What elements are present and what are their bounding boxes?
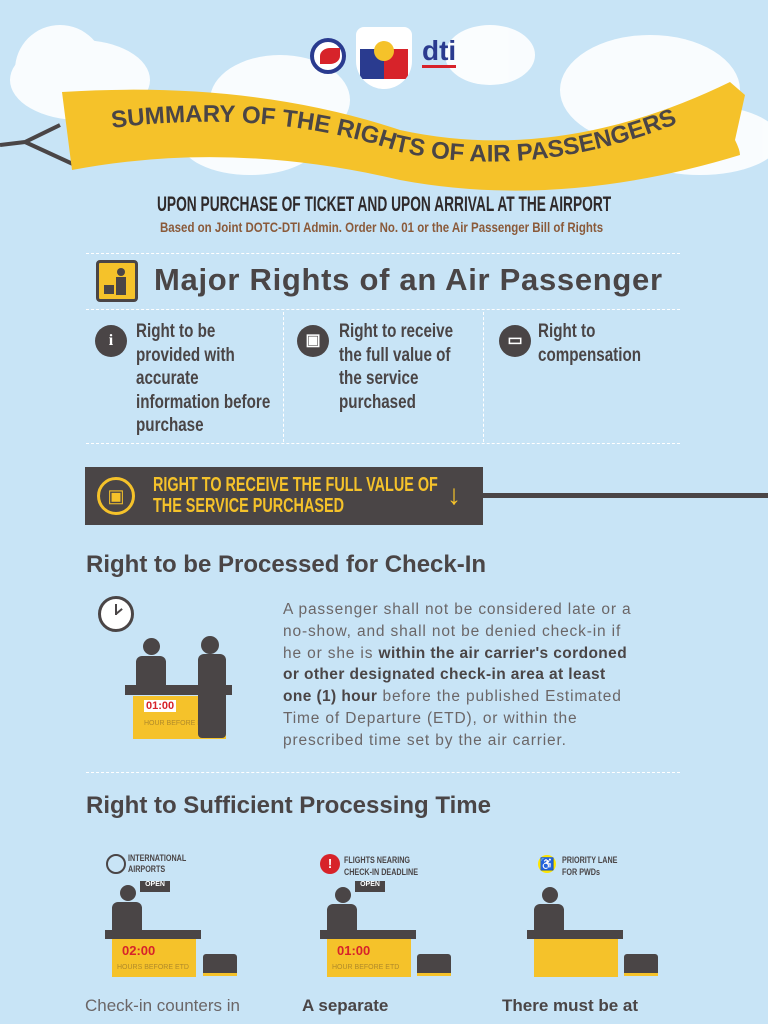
section bar: ▣ <box>107 486 124 506</box>
panel: three major rights: Right to receive <box>339 321 453 342</box>
panel: three major rights: Right to <box>538 321 595 342</box>
heading: major rights: Major Rights of an Air Passenger <box>154 262 663 297</box>
text: counter captions: Check-in counters in <box>85 996 240 1015</box>
logos <box>310 27 456 89</box>
text: There must be at <box>502 996 638 1015</box>
counter: international: INTERNATIONAL <box>128 853 186 863</box>
counter: PWD: FOR PWDs <box>562 867 600 877</box>
section bar: RIGHT TO RECEIVE THE FULL VALUE OF <box>153 474 438 496</box>
source line: Based on Joint DOTC-DTI Admin. Order No. 01 or the Air Passenger Bill of Rights <box>160 219 603 235</box>
icon: passenger <box>96 260 138 302</box>
illustration: check-in counter: HOUR BEFORE ETD <box>144 720 211 727</box>
text: check-in rule: or other designated check-in area at least <box>283 666 606 683</box>
heading: processing time: Right to Sufficient Processing Time <box>86 792 491 819</box>
banner title <box>0 82 745 191</box>
panel: three major rights: information before <box>136 392 270 412</box>
text: check-in rule: Time of Departure (ETD), or within the <box>283 710 577 727</box>
counter: PWD <box>527 855 658 977</box>
panel: three major rights: accurate <box>136 368 199 389</box>
panel: three major rights: the full value of <box>339 344 450 366</box>
logo: seal <box>356 27 412 89</box>
heading: check-in: Right to be Processed for Check-In <box>86 551 486 578</box>
counter: PWD: ♿ <box>540 857 554 871</box>
counter: nearing deadline: OPEN <box>360 881 380 888</box>
counter: international: 02:00 <box>122 943 155 958</box>
counter: nearing deadline: ! <box>328 856 332 871</box>
text: check-in rule: one (1) hour before the published Estimated <box>283 688 622 705</box>
right 1 <box>95 325 127 357</box>
section bar <box>85 467 483 525</box>
right 2 <box>297 325 329 357</box>
counter: PWD: PRIORITY LANE <box>562 855 617 865</box>
right 2: ▣ <box>305 332 321 349</box>
counter: international: HOURS BEFORE ETD <box>117 964 189 971</box>
panel: three major rights: purchase <box>136 415 204 436</box>
logo: dti: dti <box>422 35 456 66</box>
background clouds <box>10 25 768 175</box>
illustration: check-in counter: 01:00 <box>146 700 174 712</box>
counter: nearing deadline: CHECK-IN DEADLINE <box>344 867 418 877</box>
logo: DOTC <box>310 38 346 74</box>
text: check-in rule: he or she is within the air carrier's cordoned <box>283 645 627 662</box>
counter: nearing deadline: 01:00 <box>337 943 370 958</box>
subtitle: UPON PURCHASE OF TICKET AND UPON ARRIVAL AT THE AIRPORT <box>157 193 611 216</box>
banner title: SUMMARY OF THE RIGHTS OF AIR PASSENGERS <box>112 105 676 162</box>
illustration: check-in counter <box>98 596 232 739</box>
section bar: THE SERVICE PURCHASED <box>153 495 344 517</box>
counter: international <box>105 853 237 977</box>
panel: three major rights: compensation <box>538 344 641 366</box>
right 3 <box>499 325 531 357</box>
text: A separate <box>302 996 388 1015</box>
panel: three major rights: Right to be <box>136 321 215 342</box>
right 1: i <box>109 332 113 349</box>
section bar: ↓ <box>447 479 461 510</box>
panel: three major rights <box>95 321 641 436</box>
panel: three major rights: provided with <box>136 344 235 366</box>
counter: nearing deadline <box>320 854 451 977</box>
right 3: ▭ <box>507 332 523 349</box>
panel: three major rights: the service <box>339 368 418 389</box>
text: check-in rule: prescribed time set by the air carrier. <box>283 732 567 749</box>
counter: international: AIRPORTS <box>128 864 165 874</box>
text: check-in rule: no-show, and shall not be denied check-in if <box>283 623 621 640</box>
counter: international: OPEN <box>145 881 165 888</box>
counter: nearing deadline: FLIGHTS NEARING <box>344 855 410 865</box>
text: check-in rule <box>283 601 631 749</box>
illustration: three counters <box>105 853 658 977</box>
panel: three major rights: purchased <box>339 392 416 412</box>
text: check-in rule: A passenger shall not be considered late or a <box>283 601 631 618</box>
counter: nearing deadline: HOUR BEFORE ETD <box>332 964 399 971</box>
